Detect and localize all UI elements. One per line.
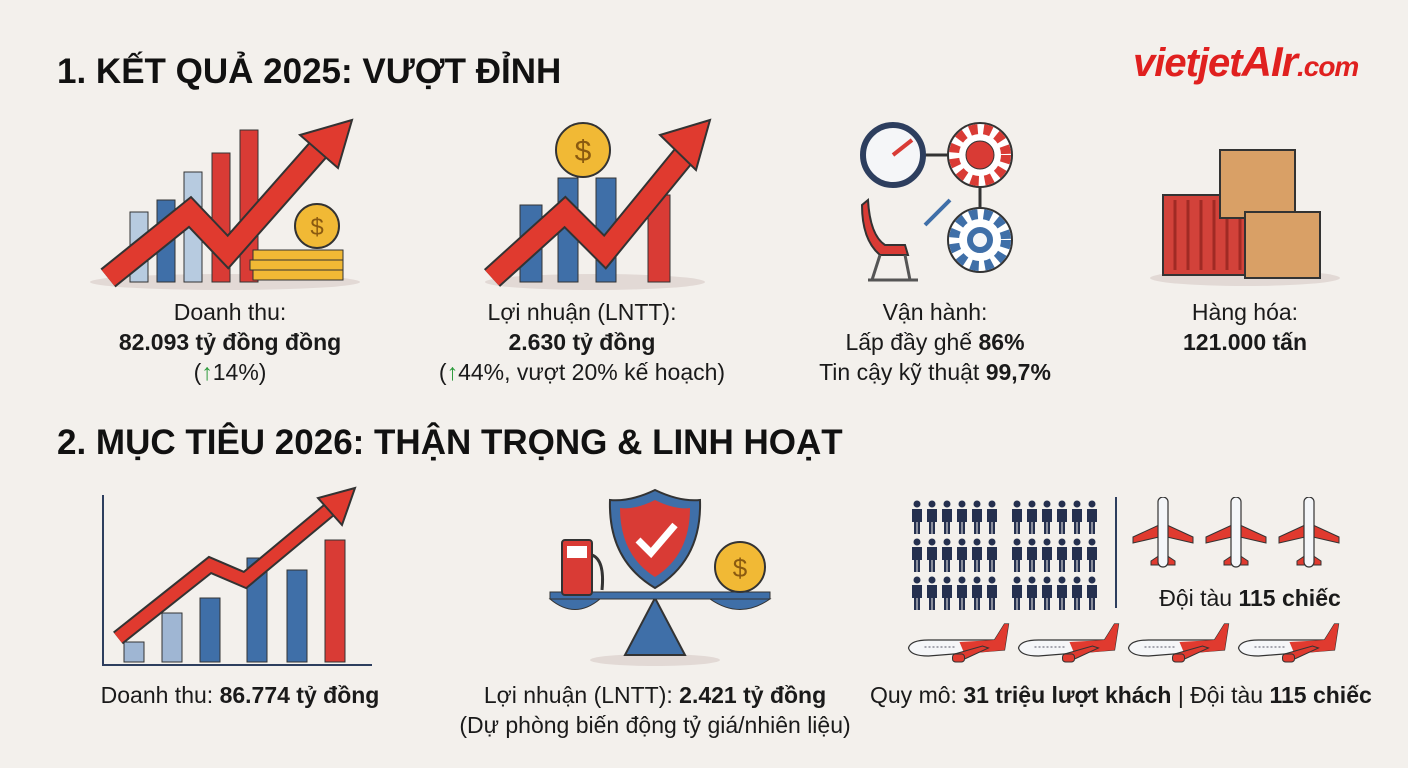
icon: operations xyxy=(862,123,1012,280)
label: operations xyxy=(819,299,1051,385)
icon: passengers xyxy=(912,500,1097,610)
label: profit 2025: Lợi nhuận (LNTT): xyxy=(488,299,676,325)
icon: revenue chart xyxy=(90,120,360,290)
icon: shield scale xyxy=(550,490,770,666)
icon: revenue chart: $ xyxy=(310,214,324,241)
label: cargo xyxy=(1183,299,1307,355)
title 2: 2. MỤC TIÊU 2026: THẬN TRỌNG & LINH HOẠT xyxy=(57,423,843,462)
label: revenue 2025: (↑14%) xyxy=(194,359,266,385)
icon: cargo xyxy=(1150,150,1340,286)
label: fleet: Đội tàu 115 chiếc xyxy=(1159,585,1341,611)
label: profit 2025: 2.630 tỷ đồng xyxy=(508,329,655,355)
label: revenue 2025: Doanh thu: xyxy=(174,299,286,325)
label: revenue 2026: Doanh thu: 86.774 tỷ đồng xyxy=(101,682,379,708)
icon: fleet top planes xyxy=(1133,497,1339,567)
label: revenue 2025 xyxy=(119,299,341,385)
label: cargo: 121.000 tấn xyxy=(1183,329,1307,355)
icon: profit chart: $ xyxy=(575,135,592,168)
logo: vietjetAIr.com xyxy=(1133,38,1358,85)
label: scale: Quy mô: 31 triệu lượt khách | Đội tàu 115 chiếc xyxy=(870,682,1372,708)
icon: fleet side planes xyxy=(908,624,1338,662)
label: profit 2025 xyxy=(439,299,725,385)
label: revenue 2025: 82.093 tỷ đồng đồng xyxy=(119,329,341,355)
label: operations: Tin cậy kỹ thuật 99,7% xyxy=(819,359,1051,385)
label: profit 2026 xyxy=(459,682,851,738)
label: profit 2025: (↑44%, vượt 20% kế hoạch) xyxy=(439,359,725,385)
label: profit 2026: (Dự phòng biến động tỷ giá/nhiên liệu) xyxy=(459,712,851,738)
label: cargo: Hàng hóa: xyxy=(1192,299,1298,325)
label: operations: Lấp đầy ghế 86% xyxy=(845,329,1025,355)
label: profit 2026: Lợi nhuận (LNTT): 2.421 tỷ đồng xyxy=(484,682,826,708)
icon: shield scale: $ xyxy=(733,553,748,583)
icon: revenue target chart xyxy=(103,488,372,665)
label: operations: Vận hành: xyxy=(883,299,987,325)
title 1: 1. KẾT QUẢ 2025: VƯỢT ĐỈNH xyxy=(57,52,561,91)
icon: profit chart xyxy=(485,120,710,290)
